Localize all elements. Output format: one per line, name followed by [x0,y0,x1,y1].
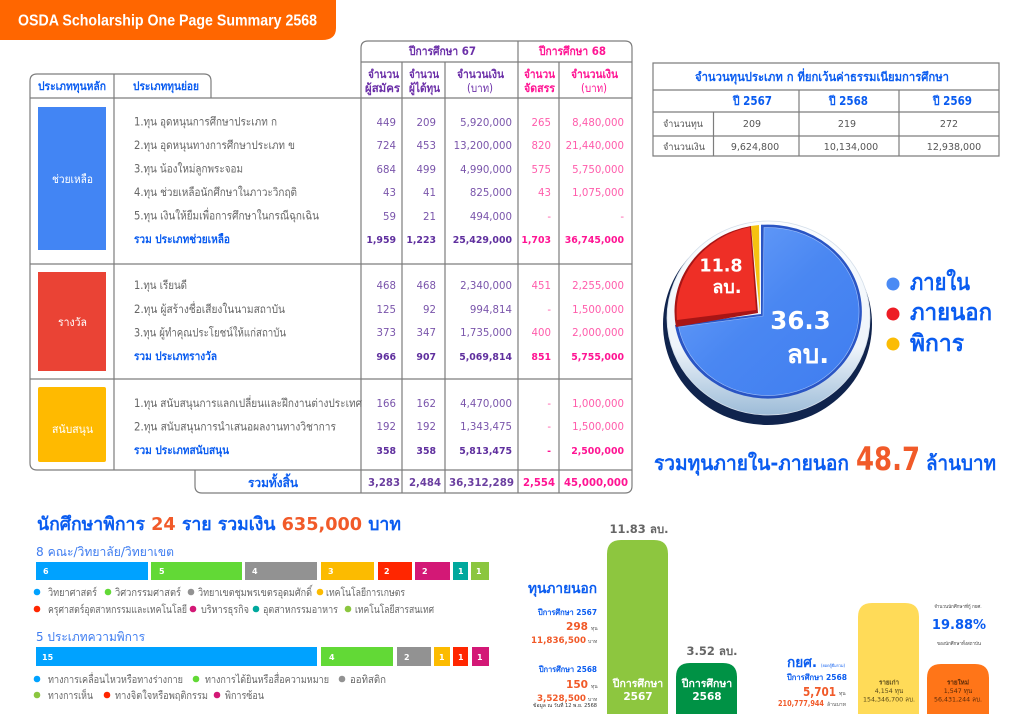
stacked bar: faculties: 1 [458,567,464,576]
pie slice: external 11.8: 11.8 [699,256,743,276]
external scholarships summary [528,581,598,709]
data: amount year 67: 25,429,000 [453,235,512,246]
legend: disability types: ทางการเห็น [48,688,93,702]
bar: new loans: 1,547 ทุน [944,688,973,695]
legend: disability types: พิการซ้อน [225,690,264,702]
column headers: academic year 67: จำนวนเงิน [457,67,504,81]
legend: faculties: บริหารธุรกิจ [201,604,249,616]
data: applicants: 192 [377,422,396,433]
pie total caption: 48.7 [856,440,920,478]
data: allocated year 68: 400 [532,328,551,339]
student loan summary: ล้านบาท [827,701,846,708]
data: amount year 68: 1,000,000 [572,399,624,410]
data: recipients: 21 [423,212,436,223]
table: type ก scholarships with tuition waiver: ปี 2567 [733,94,772,108]
data: amount year 68: 5,750,000 [572,165,624,176]
legend: faculties: อุตสาหกรรมอาหาร [263,604,338,616]
data: allocated year 68: 575 [532,165,551,176]
table: type ก scholarships with tuition waiver: 10,134,000 [824,142,878,153]
pie total caption [654,440,996,478]
column headers: academic year 68: จำนวนเงิน [571,67,618,81]
callout: share of loan students: 19.88% [932,618,986,633]
data: recipients: 192 [417,422,436,433]
data: applicants: 166 [377,399,396,410]
scholarship names: 2.ทุน อุดหนุนทางการศึกษาประเภท ข [134,138,295,152]
column headers: academic year 67 [365,44,504,96]
external scholarships summary: ทุน [591,626,598,632]
student loan summary: กยศ. [787,655,817,671]
data: recipients: 499 [417,165,436,176]
pie slice: external 11.8 [674,226,758,327]
data: amount year 67: 5,920,000 [460,118,512,129]
data: applicants [366,118,396,457]
data: applicants: 724 [377,141,396,152]
scholarship names: รวมทั้งสิ้น [248,473,298,490]
data: amount year 67: 5,813,475 [459,446,512,457]
column headers: scholarship types: ประเภททุนย่อย [133,79,199,94]
stacked bar: disability types: 4 [329,653,335,662]
data: applicants: 125 [377,305,396,316]
grand totals: 2,484 [409,476,441,489]
data: allocated year 68: 851 [531,352,551,363]
disability types subheading: 5 ประเภทความพิการ [36,629,145,644]
bar: external 2568 [676,644,738,714]
stacked bar: disability types: 2 [404,653,410,662]
data: recipients: 162 [417,399,436,410]
bar: existing loans: 4,154 ทุน [875,688,904,695]
pie total caption: ล้านบาท [926,451,996,475]
column headers: academic year 67: ปีการศึกษา 67 [408,44,476,58]
data: allocated year 68: 820 [532,141,551,152]
stacked bar: disability types [36,647,489,666]
data: amount year 68: 21,440,000 [566,141,624,152]
external scholarships summary: บาท [588,697,597,703]
external scholarships summary: ปีการศึกษา 2567 [537,607,597,617]
stacked bar: disability types: 15 [42,653,54,662]
data: amount year 68: 1,075,000 [572,188,624,199]
legend: faculties: ครุศาสตร์อุตสาหกรรมและเทคโนโลยี [48,603,187,616]
category: support: สนับสนุน [52,422,93,436]
stacked bar: faculties: 6 [43,567,49,576]
data: amount year 67: 494,000 [470,212,512,223]
legend: disability types: ทางการได้ยินหรือสื่อความหมาย [205,672,329,686]
student loan summary: (ยอดกู้ยืมรวม) [821,663,845,669]
data: recipients [406,118,436,457]
pie chart [663,221,872,425]
data: applicants: 1,959 [366,235,396,246]
table: type ก scholarships with tuition waiver: ปี 2568 [829,94,868,108]
column headers: scholarship types: ประเภททุนหลัก [38,79,106,94]
data: amount year 68: 36,745,000 [565,235,624,246]
stacked bar: disability types: 1 [458,653,464,662]
table: type ก scholarships with tuition waiver: จำนวนทุนประเภท ก ที่ยกเว้นค่าธรรมเนียมการศึกษา [695,68,949,85]
external scholarships summary: บาท [588,639,597,645]
pie legend: พิการ [910,331,965,357]
stacked bar: faculties: 1 [476,567,482,576]
bar: external 2567: ปีการศึกษา [611,677,663,690]
legend: disability types: ทางการเคลื่อนไหวหรือทางร่างกาย [48,672,183,686]
legend: disability types [34,672,386,702]
external scholarships summary: 3,528,500 [537,694,586,704]
legend: disability types: ออทิสติก [350,674,386,686]
data: amount year 68: - [620,212,624,223]
data: amount year 68: 2,000,000 [572,328,624,339]
pie slice: internal 36.3 [675,225,862,399]
data: recipients: 453 [417,141,436,152]
bar: external 2567 [607,522,669,714]
pie legend: ภายนอก [910,300,992,326]
bar: external 2568: ปีการศึกษา [680,677,732,690]
bar: existing loans: รายเก่า [879,680,900,686]
table: type ก scholarships with tuition waiver [653,63,999,156]
scholarship names: 1.ทุน อุดหนุนการศึกษาประเภท ก [134,114,277,128]
data: allocated year 68: - [547,399,551,410]
external scholarships summary: 298 [566,620,588,633]
callout: share of loan students: ของนักศึกษาทั้งสถาบัน [937,640,981,647]
scholarship names [134,114,363,490]
stacked bar: disability types: 1 [439,653,445,662]
stacked bar: faculties: 5 [159,567,165,576]
data: allocated year 68 [521,118,551,457]
data: amount year 68: 1,500,000 [572,305,624,316]
data: allocated year 68: 451 [532,281,551,292]
data: amount year 67 [453,118,512,457]
student loan summary: ปีการศึกษา 2568 [786,672,847,682]
table: type ก scholarships with tuition waiver: จำนวนเงิน [663,142,705,153]
data: allocated year 68: - [547,446,551,457]
column headers: academic year 68: ปีการศึกษา 68 [538,44,606,58]
data: amount year 67: 13,200,000 [454,141,512,152]
faculty subheading: 8 คณะ/วิทยาลัย/วิทยาเขต [36,544,174,559]
data: recipients: 347 [417,328,436,339]
scholarship names: รวม ประเภทช่วยเหลือ [134,232,230,246]
legend: faculties: วิทยาเขตชุมพรเขตรอุดมศักดิ์ [198,584,313,599]
data: amount year 68: 8,480,000 [572,118,624,129]
title banner [0,0,336,40]
data: amount year 67: 994,814 [470,305,512,316]
column headers: academic year 67: ผู้ได้ทุน [409,81,440,96]
data: allocated year 68: 1,703 [521,235,551,246]
data: allocated year 68: 43 [538,188,551,199]
data: applicants: 468 [377,281,396,292]
grand totals: 2,554 [523,476,555,489]
data: applicants: 449 [377,118,396,129]
table: type ก scholarships with tuition waiver: 272 [940,119,958,130]
external scholarships summary: ทุน [591,684,598,690]
stacked bar: faculties: 4 [252,567,258,576]
data: recipients: 358 [416,446,436,457]
scholarship names: 3.ทุน ผู้ทำคุณประโยชน์ให้แก่สถาบัน [134,326,286,340]
stacked bar: disability types: 1 [477,653,483,662]
callout: share of loan students [932,603,986,647]
bar: external 2568: 2568 [692,691,722,703]
data: amount year 67: 1,735,000 [460,328,512,339]
bar: external 2567: 2567 [623,691,653,703]
data: amount year 68: 2,500,000 [571,446,624,457]
column headers: academic year 67: จำนวน [409,67,439,81]
pie total caption: รวมทุนภายใน-ภายนอก [654,451,849,476]
scholarship names: 2.ทุน ผู้สร้างชื่อเสียงในนามสถาบัน [134,301,285,316]
table: type ก scholarships with tuition waiver: 209 [743,119,761,130]
grand totals: 45,000,000 [564,476,628,489]
legend: faculties: วิทยาศาสตร์ [48,586,97,599]
external scholarships summary: 150 [566,678,588,691]
external scholarships summary: ปีการศึกษา 2568 [538,664,597,674]
student loan summary: 210,777,944 [778,699,824,708]
category: assistance: ช่วยเหลือ [52,172,93,186]
data: allocated year 68: 265 [532,118,551,129]
bar: external 2568: 3.52 ลบ. [686,644,738,658]
pie slice: internal 36.3: 36.3 [770,306,831,335]
data: amount year 67: 4,990,000 [460,165,512,176]
data: recipients: 468 [417,281,436,292]
column headers: academic year 68 [524,44,618,95]
table: type ก scholarships with tuition waiver: 219 [838,119,856,130]
bar: new loans: 56,431,244 ลบ. [934,696,982,704]
data: recipients: 41 [423,188,436,199]
stacked bar: faculties: 2 [384,567,390,576]
table: type ก scholarships with tuition waiver: 9,624,800 [731,142,779,153]
column headers: academic year 67: ผู้สมัคร [365,81,401,96]
main scholarship table [30,41,632,493]
data: amount year 67: 2,340,000 [460,281,512,292]
data: applicants: 966 [376,352,396,363]
scholarship names: 2.ทุน สนับสนุนการนำเสนอผลงานทางวิชาการ [134,420,336,434]
data: applicants: 59 [383,212,396,223]
legend: disability types: ทางจิตใจหรือพฤติกรรม [115,689,208,702]
category: support [38,387,106,462]
student loan summary [778,655,847,708]
data: amount year 67: 1,343,475 [460,422,512,433]
column headers: academic year 67: (บาท) [467,81,493,95]
bar: existing loans [858,603,919,714]
data: amount year 68: 5,755,000 [571,352,624,363]
pie legend: ภายใน [910,268,970,296]
data: recipients: 209 [417,118,436,129]
external scholarships summary: ทุนภายนอก [528,581,597,597]
table: type ก scholarships with tuition waiver: จำนวนทุน [663,119,703,130]
student loan summary: 5,701 [803,685,836,699]
grand totals [368,476,628,489]
category: award: รางวัล [58,315,87,329]
column headers: academic year 68: (บาท) [581,81,607,95]
data: allocated year 68: - [547,212,551,223]
stacked bar: faculties [36,562,489,580]
external scholarships summary: ข้อมูล ณ วันที่ 12 พ.ย. 2568 [533,702,597,709]
bar: new loans [927,664,989,714]
data: amount year 68: 1,500,000 [572,422,624,433]
external scholarships summary: 11,836,500 [531,636,586,646]
data: amount year 68 [565,118,624,457]
column headers: academic year 68: จัดสรร [524,81,556,95]
bar: external 2567: 11.83 ลบ. [609,522,669,536]
data: amount year 67: 4,470,000 [460,399,512,410]
data: applicants: 684 [377,165,396,176]
category: award [38,272,106,371]
bar: existing loans: 154,346,700 ลบ. [863,696,915,704]
pie slice: external 11.8: ลบ. [712,277,742,298]
legend: faculties [34,584,434,616]
data: allocated year 68: - [547,305,551,316]
stacked bar: faculties: 2 [422,567,428,576]
stacked bar: faculties: 3 [328,567,334,576]
scholarship names: 5.ทุน เงินให้ยืมเพื่อการศึกษาในกรณีฉุกเฉิน [134,208,319,222]
pie slice: disabled students [751,225,760,313]
scholarship names: 1.ทุน เรียนดี [134,278,187,292]
disabled students heading: นักศึกษาพิการ 24 ราย รวมเงิน 635,000 บาท [37,514,401,535]
data: recipients: 907 [416,352,436,363]
grand totals: 36,312,289 [449,476,514,489]
bar: new loans: รายใหม่ [947,678,969,686]
pie slice: internal 36.3: ลบ. [787,340,829,370]
data: applicants: 373 [377,328,396,339]
category: assistance [38,107,106,250]
legend: faculties: เทคโนโลยีการเกษตร [326,586,405,599]
scholarship names: 3.ทุน น้องใหม่ลูกพระจอม [134,162,243,176]
column headers: academic year 68: จำนวน [524,67,555,81]
table: type ก scholarships with tuition waiver: ปี 2569 [933,94,972,108]
title banner: OSDA Scholarship One Page Summary 2568 [18,12,317,30]
student loan summary: ทุน [839,691,846,697]
data: allocated year 68: - [547,422,551,433]
column headers: scholarship types [38,79,199,94]
callout: share of loan students: จำนวนนักศึกษาที่กู้ กยศ. [934,603,982,610]
pie legend [886,268,992,357]
legend: faculties: เทคโนโลยีสารสนเทศ [355,603,434,616]
column headers: academic year 67: จำนวน [368,67,399,81]
data: amount year 68: 2,255,000 [572,281,624,292]
scholarship names: 1.ทุน สนับสนุนการแลกเปลี่ยนและฝึกงานต่างประเทศ [134,395,363,410]
scholarship names: 4.ทุน ช่วยเหลือนักศึกษาในภาวะวิกฤติ [134,185,297,199]
data: recipients: 1,223 [406,235,436,246]
legend: faculties: วิศวกรรมศาสตร์ [115,586,181,599]
data: recipients: 92 [423,305,436,316]
data: applicants: 43 [383,188,396,199]
data: amount year 67: 5,069,814 [459,352,512,363]
scholarship names: รวม ประเภทรางวัล [134,349,217,363]
data: amount year 67: 825,000 [470,188,512,199]
table: type ก scholarships with tuition waiver: 12,938,000 [927,142,981,153]
scholarship names: รวม ประเภทสนับสนุน [134,443,229,458]
data: applicants: 358 [376,446,396,457]
grand totals: 3,283 [368,476,400,489]
